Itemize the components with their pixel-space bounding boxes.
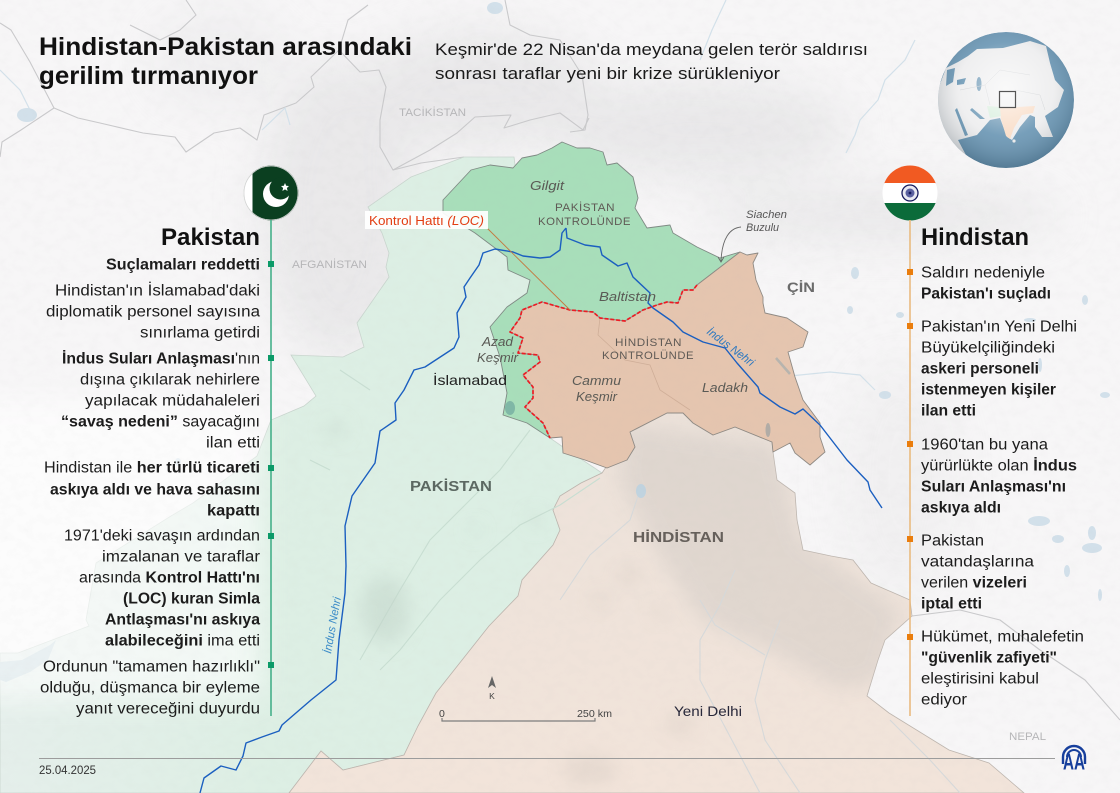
river label: Indus Nehri (Pakistan): İndus Nehri [322, 596, 344, 655]
Siachen callout [718, 209, 787, 262]
country labels: NEPAL [1009, 731, 1046, 743]
subtitle [435, 40, 868, 83]
lake in Azad Kashmir [505, 401, 515, 415]
Pakistan flag [243, 165, 298, 221]
item: trade and airspace: kapattı [207, 502, 260, 520]
item: visas cancelled [921, 532, 1034, 612]
item: embassy personnel: Pakistan'ın Yeni Delhi [921, 318, 1077, 336]
item: trade and airspace [44, 460, 260, 520]
item: security lapse [921, 628, 1084, 708]
subtitle: sonrası taraflar yeni bir krize sürükleniyor [435, 64, 780, 83]
item: army readiness: yanıt vereceğini duyurdu [76, 700, 260, 718]
item: army readiness [40, 658, 260, 718]
item: Indus Waters Treaty: yapılacak müdahaleleri [85, 392, 260, 410]
item: Indus Waters Treaty suspended [921, 436, 1077, 516]
title: gerilim tırmanıyor [39, 62, 258, 90]
country labels: Yeni Delhi [674, 703, 742, 719]
region labels [477, 179, 748, 404]
region labels: Azad [481, 335, 514, 349]
date: 25.04.2025 [39, 765, 96, 777]
region labels: PAKİSTAN [555, 201, 615, 214]
footer line [39, 758, 1055, 760]
item: blamed Pakistan [921, 264, 1051, 302]
country labels: PAKİSTAN [410, 478, 492, 495]
item: security lapse: "güvenlik zafiyeti" [921, 650, 1057, 666]
item: Indus Waters Treaty: ilan etti [206, 434, 260, 452]
pale rivers and lakes [0, 0, 1110, 601]
heading: Hindistan: Hindistan [921, 224, 1029, 251]
Pakistan rivers and cities [310, 370, 600, 670]
India flag [882, 165, 938, 222]
item: Simla Agreement: imzalanan ve taraflar [102, 548, 260, 566]
item: blamed Pakistan: Pakistan'ı suçladı [921, 286, 1051, 302]
item: trade and airspace: askıya aldı ve hava sahasını [50, 482, 260, 498]
region labels: Ladakh [702, 381, 748, 395]
item: diplomatic staff: diplomatik personel sayısına [46, 304, 260, 320]
country labels: TACİKİSTAN [399, 106, 466, 119]
item: blamed Pakistan: Saldırı nedeniyle [921, 264, 1045, 282]
item: security lapse: eleştirisini kabul [921, 670, 1039, 688]
item: diplomatic staff: Hindistan'ın İslamabad'daki [55, 282, 260, 300]
scale bar: 0 [439, 708, 445, 720]
LOC callout [365, 211, 570, 310]
item: Indus Waters Treaty suspended: yürürlükte olan İndus [921, 458, 1077, 474]
locator globe [930, 32, 1074, 168]
item: visas cancelled: iptal etti [921, 596, 982, 612]
item: Simla Agreement: Antlaşması'nı askıya [105, 612, 260, 628]
region: Pakistan [0, 157, 602, 793]
region: India [289, 413, 1024, 793]
region: Pakistan-controlled Kashmir [443, 142, 740, 438]
item: security lapse: ediyor [921, 692, 967, 708]
heading: Pakistan: Pakistan [161, 224, 260, 251]
item: visas cancelled: verilen vizeleri [921, 574, 1027, 592]
timeline: Hindistan [907, 220, 913, 716]
country labels [292, 106, 1046, 743]
item: embassy personnel: askeri personeli [921, 360, 1039, 378]
item: Simla Agreement: (LOC) kuran Simla [123, 590, 260, 608]
item: visas cancelled: vatandaşlarına [921, 554, 1034, 570]
country labels: İslamabad [433, 371, 507, 388]
item: embassy personnel: istenmeyen kişiler [921, 382, 1056, 398]
country labels: AFGANİSTAN [292, 258, 367, 271]
item: Indus Waters Treaty suspended: Suları Anlaşması'nı [921, 478, 1066, 496]
item: embassy personnel: Büyükelçiliğindeki [921, 340, 1055, 356]
timeline: Pakistan [268, 220, 274, 716]
item: army readiness: Ordunun "tamamen hazırlıklı" [43, 658, 260, 676]
region labels: Gilgit [530, 179, 565, 193]
item: army readiness: olduğu, düşmanca bir eyleme [40, 680, 260, 696]
Anadolu Agency logo [1063, 746, 1085, 774]
title: Hindistan-Pakistan arasındaki [39, 33, 412, 61]
soft fade behind left column [0, 400, 260, 700]
panel: Hindistan [907, 220, 1084, 716]
LOC callout: Kontrol Hattı (LOC) [369, 213, 484, 228]
region labels: Keşmir [477, 351, 519, 365]
Indus river [200, 228, 882, 793]
Anadolu Agency logo: AA [1063, 748, 1085, 774]
internal division lines and small lakes [598, 318, 790, 437]
item: Simla Agreement: arasında Kontrol Hattı'nı [79, 570, 260, 586]
region labels: Baltistan [599, 290, 656, 304]
item: Simla Agreement [64, 528, 260, 650]
item: Indus Waters Treaty suspended: askıya aldı [921, 500, 1001, 516]
north arrow [488, 676, 496, 701]
item: rejected accusations: Suçlamaları reddetti [106, 256, 260, 274]
Siachen callout: Siachen [746, 209, 787, 221]
region labels: HİNDİSTAN [615, 336, 682, 349]
item: Simla Agreement: 1971'deki savaşın ardından [64, 528, 260, 544]
item: Simla Agreement: alabileceğini ima etti [105, 632, 260, 650]
Siachen callout: Buzulu [746, 222, 779, 234]
item: diplomatic staff: sınırlama getirdi [140, 324, 260, 342]
lake: western water [0, 640, 56, 682]
item: embassy personnel [921, 318, 1077, 420]
region labels: KONTROLÜNDE [602, 350, 694, 362]
title [39, 33, 412, 90]
country labels: HİNDİSTAN [633, 529, 724, 546]
item: Indus Waters Treaty: dışına çıkılarak nehirlere [80, 372, 260, 388]
region labels: Keşmir [576, 390, 618, 404]
item: diplomatic staff [46, 282, 260, 342]
Control line (LOC) [510, 285, 697, 438]
region labels: KONTROLÜNDE [538, 216, 631, 228]
region: India-controlled Kashmir [510, 252, 825, 468]
north arrow: K [489, 691, 495, 701]
item: visas cancelled: Pakistan [921, 532, 984, 550]
item: Indus Waters Treaty: “savaş nedeni” sayacağını [61, 414, 260, 430]
item: embassy personnel: ilan etti [921, 402, 976, 420]
item: Indus Waters Treaty suspended: 1960'tan bu yana [921, 436, 1048, 454]
India mountain shading [560, 425, 960, 793]
subtitle: Keşmir'de 22 Nisan'da meydana gelen terör saldırısı [435, 40, 868, 59]
panel: Pakistan [40, 220, 274, 718]
item: security lapse: Hükümet, muhalefetin [921, 628, 1084, 646]
item: Indus Waters Treaty: İndus Suları Anlaşması'nın [62, 350, 260, 368]
item: trade and airspace: Hindistan ile her türlü ticareti [44, 460, 260, 476]
region labels: Cammu [572, 374, 621, 388]
country labels: ÇİN [787, 279, 815, 295]
river label: Indus Nehri (Kashmir): İndus Nehri [704, 326, 756, 369]
scale bar [439, 708, 612, 721]
item: Indus Waters Treaty [61, 350, 260, 452]
scale bar: 250 km [577, 708, 612, 720]
